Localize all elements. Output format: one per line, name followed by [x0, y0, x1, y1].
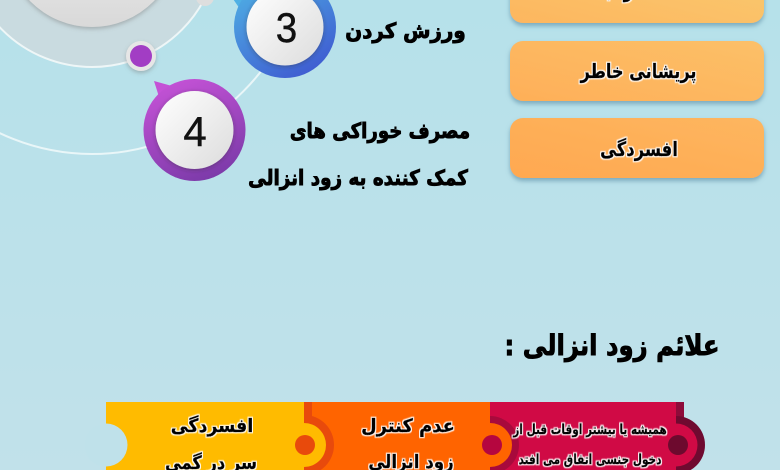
step 4 label: مصرف خوراکی های — [290, 119, 470, 143]
step 4 label: کمک کننده به زود انزالی — [248, 166, 468, 190]
card: depression: افسردگی — [600, 137, 678, 161]
small marker: purple dot — [126, 41, 156, 71]
card: distraction: پریشانی خاطر — [580, 60, 696, 83]
strip text: orange: عدم کنترل — [361, 416, 455, 437]
strip text: yellow — [165, 414, 257, 470]
step 4 label — [248, 119, 470, 190]
symptom strip — [84, 402, 705, 470]
card: depression — [510, 118, 764, 178]
step 4 badge — [144, 79, 246, 181]
step 3 badge — [231, 0, 336, 78]
heading: symptoms: علائم زود انزالی : — [505, 330, 719, 362]
segment: orange — [304, 402, 519, 470]
strip text: yellow: افسردگی — [171, 414, 253, 437]
concentric circle diagram — [0, 0, 306, 154]
step 3 badge: 3 — [276, 3, 297, 51]
card: top (cropped) — [510, 0, 764, 23]
strip text: crimson: همیشه یا بیشتر اوقات قبل از — [512, 422, 667, 438]
step 3 label: ورزش کردن — [345, 18, 466, 43]
strip text: crimson: دخول جنسی اتفاق می افتد — [518, 452, 662, 468]
segment: crimson — [490, 402, 705, 470]
small marker: top — [196, 0, 214, 6]
strip text: orange — [361, 416, 455, 470]
segment: yellow — [84, 402, 334, 470]
strip text: crimson — [512, 422, 667, 468]
card: distraction — [510, 41, 764, 101]
step 4 badge: 4 — [183, 108, 207, 155]
